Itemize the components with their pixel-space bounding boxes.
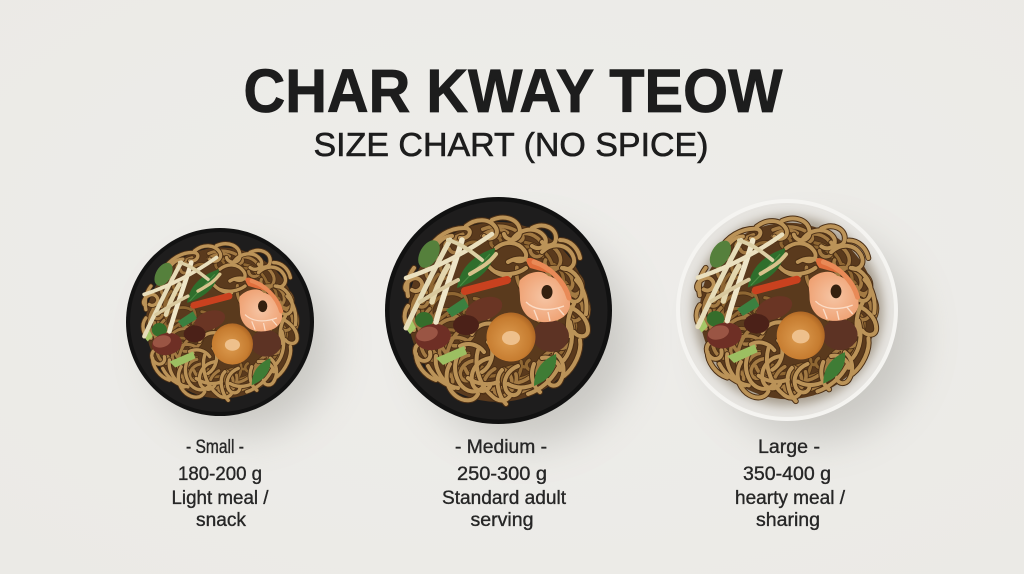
title: CHAR KWAY TEOW — [244, 57, 783, 125]
caption: large — [735, 437, 846, 531]
caption: large: 350-400 g — [743, 464, 831, 485]
caption: small: snack — [196, 510, 246, 531]
caption: small: Light meal / — [172, 488, 269, 509]
bowl: small — [123, 223, 332, 434]
caption: medium: 250-300 g — [457, 464, 547, 485]
caption: small: 180-200 g — [178, 464, 262, 485]
bowl: medium — [381, 193, 632, 444]
subtitle: SIZE CHART (NO SPICE) — [314, 127, 708, 164]
caption: small: - Small - — [186, 437, 244, 458]
bowl: large — [673, 195, 918, 440]
caption: medium — [442, 437, 567, 531]
caption: large: sharing — [756, 510, 820, 531]
caption: large: Large - — [758, 437, 820, 458]
caption: small — [172, 437, 269, 531]
caption: medium: Standard adult — [442, 488, 567, 509]
caption: large: hearty meal / — [735, 488, 846, 509]
caption: medium: - Medium - — [455, 437, 547, 458]
caption: medium: serving — [470, 510, 534, 531]
